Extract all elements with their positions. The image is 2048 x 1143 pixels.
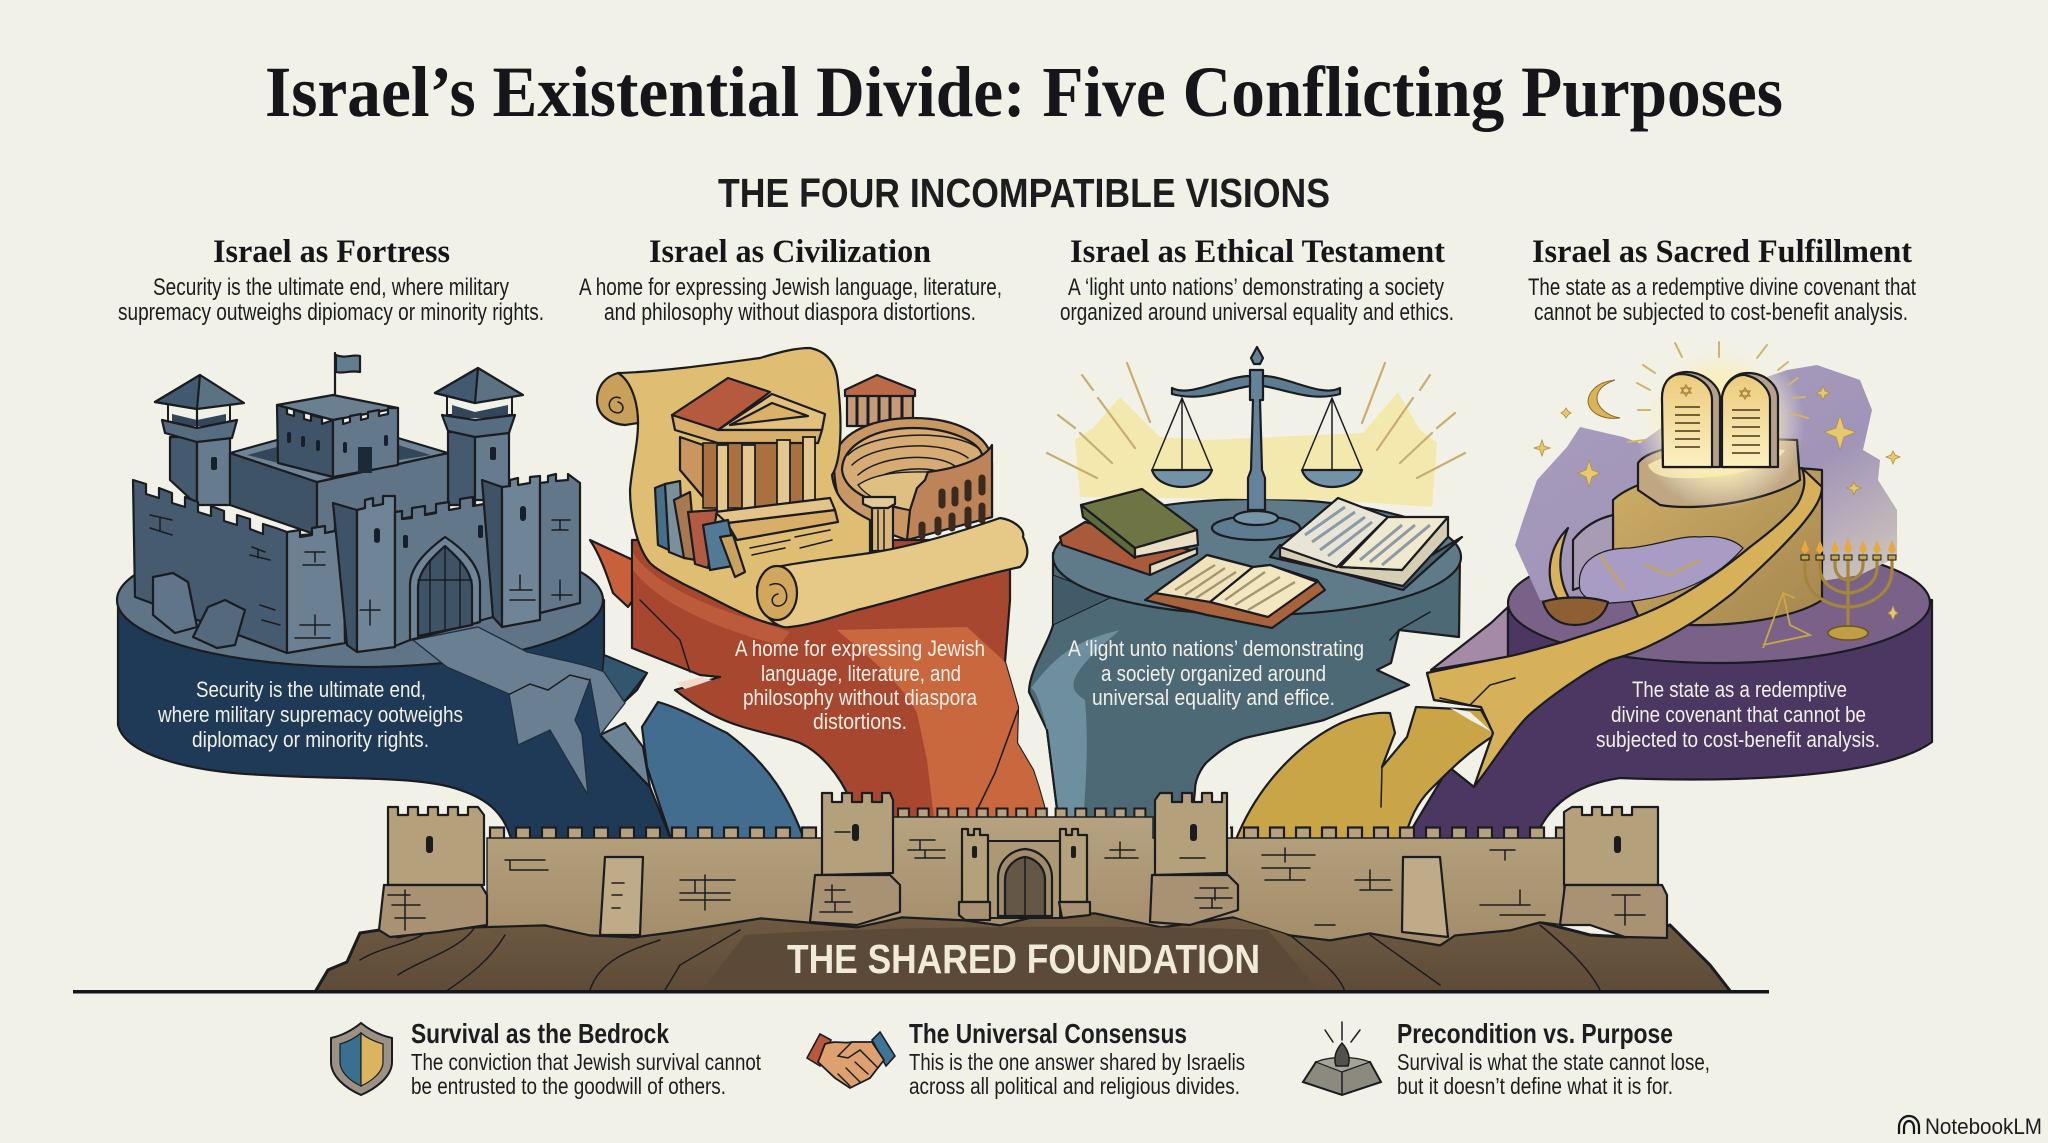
column: sacred fulfillment heading and description: Israel as Sacred Fulfillment — [1532, 234, 1912, 270]
flow text: fortress: diplomacy or minority rights. — [192, 727, 429, 752]
flow text: ethical: a society organized around — [1101, 661, 1326, 686]
illustration: scroll, temple, colosseum — [597, 348, 1027, 627]
cracked road — [413, 627, 625, 795]
flow text: ethical: A ‘light unto nations’ demonstrating — [1068, 636, 1364, 661]
panel: civilization pedestal and red flow — [590, 540, 1052, 842]
gate tower left — [333, 496, 395, 652]
flow text: fortress: Security is the ultimate end, — [196, 677, 426, 702]
right front towers — [482, 474, 580, 627]
lower cylinder — [1613, 467, 1822, 625]
curtain wall — [475, 817, 1564, 945]
column: civilization heading and description — [579, 234, 1002, 326]
callout: precondition vs. purpose: Survival is what the state cannot lose, — [1397, 1049, 1710, 1075]
rays — [1047, 363, 1465, 478]
ground line — [73, 990, 1769, 994]
front scroll roll — [757, 518, 1027, 627]
illustration: horn and bowl — [1543, 528, 1608, 625]
flow text: civilization: distortions. — [813, 709, 907, 734]
scroll top curl — [597, 373, 638, 425]
flow text: civilization: philosophy without diaspora — [743, 685, 977, 710]
gate arch — [410, 537, 480, 640]
left pan — [1152, 398, 1212, 487]
flow text: civilization — [735, 636, 985, 734]
panel: fortress flow and pedestal — [117, 533, 805, 842]
illustration: gold constellation — [1763, 593, 1810, 648]
flow text: sacred: subjected to cost-benefit analysis. — [1596, 727, 1880, 752]
illustration: gold stars — [1534, 386, 1900, 620]
column: ethical testament heading and description: Israel as Ethical Testament — [1070, 234, 1445, 270]
column: fortress heading and description: Israel as Fortress — [213, 234, 450, 270]
illustration: books on ethical pedestal — [1060, 489, 1462, 628]
flow text: fortress: where military supremacy ootweighs — [157, 702, 463, 727]
illustration: gold ribbon and cracked lower gold flow — [1235, 468, 1822, 842]
small back temple — [845, 375, 915, 426]
panel: sacred flow and pedestal — [1404, 543, 1932, 842]
colosseum — [834, 418, 992, 540]
callout: the universal consensus: The Universal Consensus — [909, 1018, 1187, 1049]
wall crenellations — [487, 807, 1564, 840]
flow text: ethical: universal equality and effice. — [1092, 685, 1335, 710]
scale base — [1212, 516, 1300, 540]
illustration: scales of justice with glow — [1047, 347, 1465, 540]
column: sacred fulfillment heading and description — [1528, 234, 1916, 326]
brickwork — [505, 840, 1545, 925]
flag — [335, 353, 360, 400]
callout: survival as the bedrock: Survival as the Bedrock — [411, 1018, 669, 1049]
title: Israel’s Existential Divide: Five Conflicting Purposes — [265, 52, 1783, 132]
column: fortress heading and description: Security is the ultimate end, where military — [153, 274, 509, 301]
flow text: fortress — [157, 677, 463, 752]
open book lower — [1145, 555, 1325, 628]
flow text: ethical — [1068, 636, 1364, 710]
back scroll sheet — [618, 348, 870, 627]
right pan — [1302, 398, 1362, 487]
inner cloud — [1579, 537, 1743, 603]
gate wall — [395, 495, 493, 646]
flow text: sacred: The state as a redemptive — [1632, 677, 1847, 702]
column: sacred fulfillment heading and description: cannot be subjected to cost-benefit analysis. — [1534, 299, 1908, 326]
column: fortress heading and description: supremacy outweighs dipiomacy or minority rights. — [118, 299, 544, 326]
left tower — [379, 807, 487, 937]
scale beam — [1172, 376, 1340, 397]
column: civilization heading and description: A home for expressing Jewish language, literature, — [579, 274, 1002, 301]
label: the shared foundation: THE SHARED FOUNDATION — [787, 936, 1260, 982]
broken stones — [153, 573, 197, 633]
callout: the universal consensus: This is the one answer shared by Israelis — [909, 1049, 1245, 1075]
illustration: gold spiral tower — [1573, 439, 1822, 625]
left watchtower — [155, 375, 244, 505]
illustration: menorah — [1801, 537, 1896, 640]
column: ethical testament heading and description: organized around universal equality and ethics. — [1060, 299, 1454, 326]
central keep — [277, 395, 398, 477]
red book — [1060, 522, 1197, 575]
logo: NotebookLM: NotebookLM — [1925, 1114, 2042, 1139]
callout: the universal consensus — [807, 1018, 1245, 1099]
callout: survival as the bedrock — [331, 1018, 761, 1099]
illustration: fortress castle — [133, 353, 580, 653]
wall brick detail — [150, 515, 380, 638]
centre-right tower — [1150, 793, 1238, 925]
right tower — [1560, 807, 1667, 938]
column: civilization heading and description: and philosophy without diaspora distortions. — [604, 299, 976, 326]
icon: stone pedestal — [1303, 1022, 1381, 1095]
centre-left tower — [810, 793, 900, 925]
section heading: the four incompatible visions: THE FOUR INCOMPATIBLE VISIONS — [718, 170, 1330, 216]
illustration: crescent moon — [1588, 380, 1620, 418]
callout: the universal consensus: across all political and religious divides. — [909, 1073, 1240, 1099]
upper cylinder — [1638, 439, 1800, 507]
temple — [672, 378, 838, 540]
icon: handshake — [807, 1032, 895, 1088]
column: sacred fulfillment heading and description: The state as a redemptive divine covenant that — [1528, 274, 1916, 301]
panel: ethical flow and pedestal — [1029, 499, 1461, 842]
callout: survival as the bedrock: The conviction that Jewish survival cannot — [411, 1049, 761, 1075]
standing stone left — [600, 857, 643, 935]
illustration: glowing stone tablets — [1628, 340, 1808, 510]
coil left — [1573, 515, 1613, 590]
right watchtower — [435, 368, 523, 505]
open book right — [1270, 498, 1462, 590]
front wall left — [133, 480, 287, 653]
column: fortress heading and description — [118, 234, 544, 326]
column: ethical testament heading and description — [1060, 234, 1454, 326]
callout: precondition vs. purpose: but it doesn’t define what it is for. — [1397, 1073, 1673, 1099]
flow text: civilization: A home for expressing Jewish — [735, 636, 985, 661]
flow text: sacred — [1596, 677, 1880, 752]
rock base — [315, 913, 1731, 992]
panel: shared foundation wall — [315, 793, 1731, 992]
callout: survival as the bedrock: be entrusted to the goodwill of others. — [411, 1073, 726, 1099]
flow text: civilization: language, literature, and — [761, 661, 961, 686]
callout: precondition vs. purpose — [1303, 1018, 1710, 1099]
callout: precondition vs. purpose: Precondition vs. Purpose — [1397, 1018, 1673, 1049]
standing stone right — [1402, 857, 1448, 937]
column: civilization heading and description: Israel as Civilization — [649, 234, 931, 270]
scale pole — [1248, 370, 1265, 510]
row of books — [655, 481, 832, 577]
green book — [1081, 489, 1198, 558]
icon: shield — [331, 1023, 392, 1095]
column fragment — [863, 497, 895, 551]
inner ward — [230, 438, 448, 535]
illustration: purple cloud — [1515, 365, 1897, 600]
yellow glow — [1075, 392, 1437, 507]
column: ethical testament heading and description: A ‘light unto nations’ demonstrating a society — [1068, 274, 1444, 301]
gatehouse — [959, 829, 1090, 920]
flow text: sacred: divine covenant that cannot be — [1611, 702, 1866, 727]
